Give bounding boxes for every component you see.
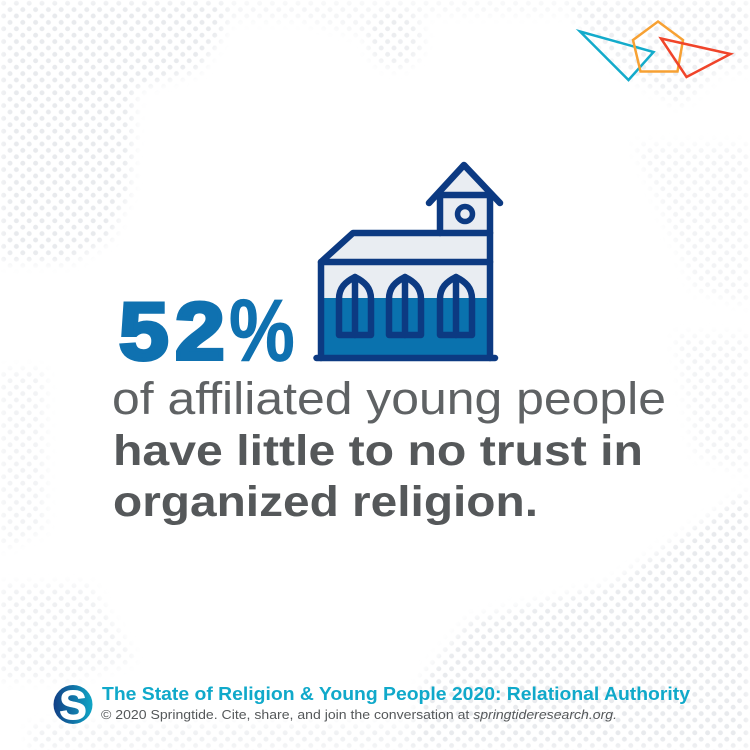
footer title: The State of Religion & Young People 2020: Relational Authority	[102, 684, 690, 704]
window 2	[389, 277, 421, 335]
percent sign: %	[229, 282, 295, 380]
church outline	[316, 165, 500, 358]
statistic: 52%	[119, 282, 295, 380]
text line 3: organized religion.	[113, 478, 538, 526]
digits 52: 52	[119, 287, 225, 377]
icon: orange pentagon	[633, 22, 683, 72]
icon: red triangle	[661, 38, 730, 77]
footer citation: © 2020 Springtide. Cite, share, and join the conversation at springtideresearch.org.	[101, 707, 617, 722]
window 1	[339, 277, 371, 335]
logo: Springtide S: S	[59, 682, 87, 728]
text line 2: have little to no trust in	[113, 427, 643, 475]
text block: statement	[112, 373, 666, 526]
text line 1: of affiliated young people	[112, 373, 666, 424]
icon: church	[316, 165, 500, 358]
icon: overlapping triangles and pentagon	[580, 22, 730, 80]
church light fill	[321, 167, 490, 300]
icon: blue triangle	[580, 32, 654, 80]
church blue lower fill	[321, 298, 490, 358]
window 3	[440, 277, 472, 335]
